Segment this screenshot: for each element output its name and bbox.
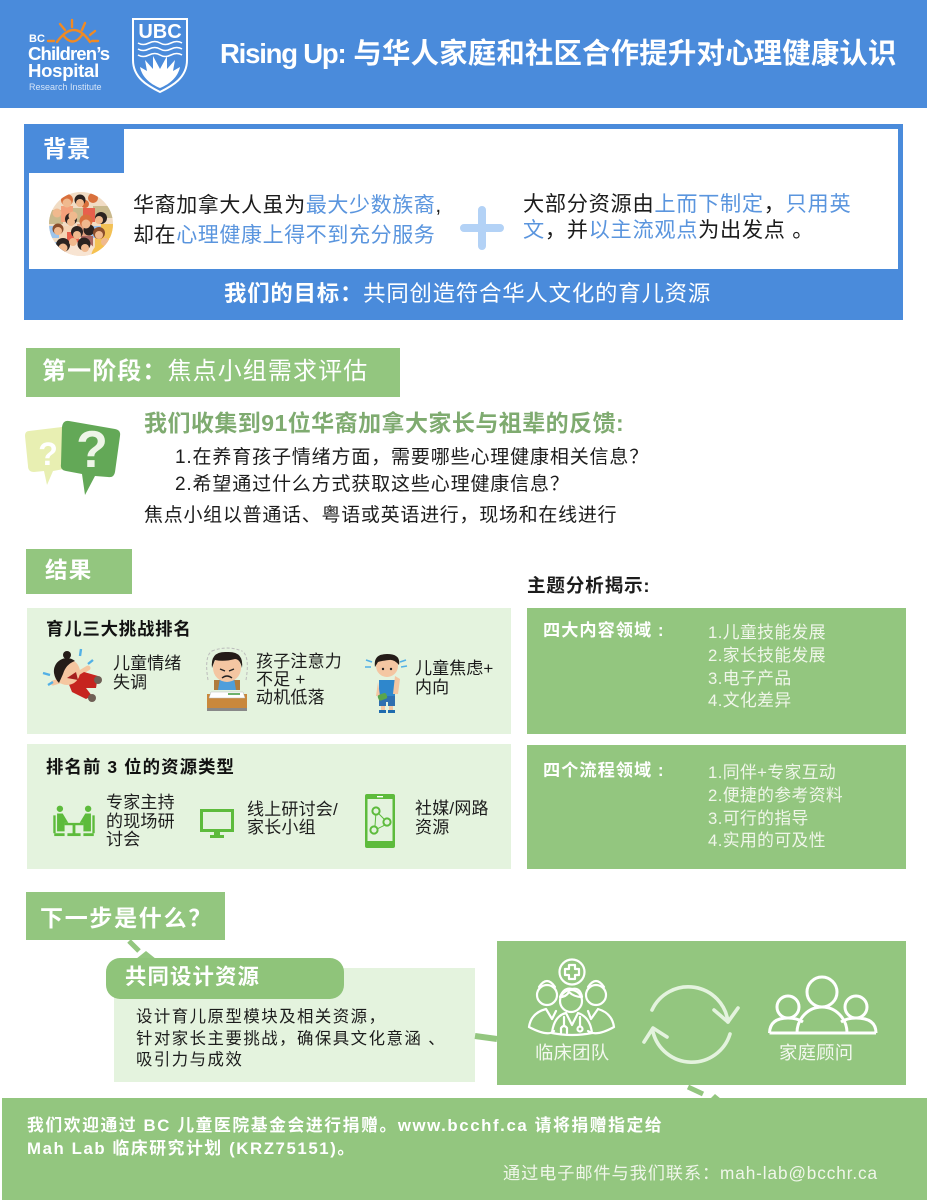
- question one: 1.在养育孩子情绪方面，需要哪些心理健康相关信息？: [175, 447, 649, 468]
- label: emotional dysregulation: 儿童情绪: [113, 654, 181, 673]
- label: inattention and low motivation: 动机低落: [256, 688, 325, 707]
- goal statement: 我们的目标：共同创造符合华人文化的育儿资源: [224, 281, 711, 306]
- heading pill: co-design resources: [106, 958, 344, 999]
- logo text: Research Institute: [29, 82, 102, 92]
- heading: phase one: [26, 348, 400, 397]
- icon: clinical team: [528, 958, 616, 1036]
- text: phase one details: [144, 410, 649, 526]
- label: anxiety and introversion: 儿童焦虑+: [415, 659, 493, 678]
- label: family advisors: 家庭顾问: [779, 1042, 853, 1063]
- logo text: Children’s: [28, 43, 109, 64]
- body text: 设计育儿原型模块及相关资源，: [136, 1008, 386, 1026]
- icon: orange sun: [46, 18, 100, 44]
- label: in-person workshop: 讨会: [106, 830, 140, 849]
- heading text: 下一步是什么？: [40, 905, 213, 931]
- heading: thematic analysis: 主题分析揭示:: [527, 575, 650, 596]
- icon: family advisors: [768, 976, 878, 1034]
- logo text: [28, 33, 110, 92]
- icon: smartphone network: [365, 794, 395, 848]
- icon: reciprocal arrows: [642, 985, 740, 1064]
- label: social media: 资源: [415, 818, 449, 836]
- text: right statement: 大部分资源由上而下制定，只用英: [523, 193, 851, 216]
- panel: four content areas: [527, 608, 906, 734]
- list: 4.实用的可及性: [708, 831, 826, 850]
- label: webinars: [247, 800, 338, 837]
- body text: 针对家长主要挑战，确保具文化意涵 、: [136, 1030, 446, 1048]
- icon: question mark bubbles: ?: [38, 436, 58, 472]
- connector: heading to co-design: [127, 940, 155, 958]
- logo: UBC shield: UBC: [138, 21, 182, 43]
- heading: results: [26, 549, 132, 594]
- list: 1.儿童技能发展: [708, 623, 826, 642]
- icon: question mark bubbles: ?: [76, 421, 108, 479]
- list: 2.家长技能发展: [708, 646, 826, 665]
- label: webinars: 线上研讨会/: [247, 800, 338, 819]
- list: 3.电子产品: [708, 669, 792, 688]
- text: left statement: [133, 194, 442, 247]
- white content area: [29, 129, 898, 269]
- list: [708, 763, 843, 850]
- label: in-person workshop: 的现场研: [106, 812, 175, 830]
- icon: crowd of people: [49, 192, 113, 256]
- method note: 焦点小组以普通话、粤语或英语进行，现场和在线进行: [144, 505, 617, 526]
- label: in-person workshop: [106, 793, 175, 849]
- label: emotional dysregulation: 失调: [113, 673, 147, 692]
- label: anxiety and introversion: 内向: [415, 678, 449, 697]
- label: social media: 社媒/网路: [415, 799, 489, 818]
- footer: [2, 1098, 927, 1200]
- contact text: 通过电子邮件与我们联系：mah-lab@bcchr.ca: [503, 1163, 878, 1183]
- icon: anxious child: [365, 654, 408, 713]
- body text: 吸引力与成效: [136, 1051, 243, 1069]
- panel heading: 四大内容领域 :: [543, 620, 665, 640]
- panel: top three parenting challenges: [27, 608, 511, 734]
- icon: plus: [460, 206, 504, 250]
- panel heading: 四个流程领域 :: [543, 760, 665, 780]
- heading text: 背景: [43, 136, 91, 162]
- connector: co-design to team panel: [474, 1033, 497, 1042]
- icon: tantrum child: [42, 648, 102, 702]
- heading text: 共同设计资源: [125, 965, 260, 989]
- text: right statement: [523, 193, 851, 242]
- icon: monitor: [200, 809, 234, 838]
- panel: background: [24, 124, 903, 320]
- panel: clinical team and family advisors: [497, 941, 906, 1085]
- list: 2.便捷的参考资料: [708, 786, 843, 805]
- list: 3.可行的指导: [708, 809, 809, 828]
- list: [708, 623, 826, 710]
- label: social media: [415, 799, 489, 836]
- panel heading: 排名前 3 位的资源类型: [46, 757, 235, 777]
- logo: UBC shield: [132, 18, 188, 94]
- heading text: 结果: [45, 558, 92, 583]
- label: webinars: 家长小组: [247, 818, 316, 837]
- connector: team panel to footer: [687, 1085, 720, 1098]
- panel heading: 育儿三大挑战排名: [46, 619, 192, 639]
- label: clinical team: 临床团队: [535, 1042, 609, 1063]
- body text: [136, 1008, 446, 1069]
- donation text: Mah Lab 临床研究计划 (KRZ75151)。: [27, 1139, 356, 1158]
- logo text: Hospital: [28, 60, 99, 81]
- text: right statement: 文，并以主流观点为出发点 。: [523, 219, 814, 242]
- question two: 2.希望通过什么方式获取这些心理健康信息？: [175, 474, 570, 495]
- text: left statement: 华裔加拿大人虽为最大少数族裔,: [133, 194, 442, 217]
- sub-heading: 我们收集到91位华裔加拿大家长与祖辈的反馈:: [144, 410, 624, 436]
- icon: question mark bubbles: [25, 420, 120, 495]
- icon: inattentive child at desk: [206, 648, 248, 711]
- panel: four process areas: [527, 745, 906, 869]
- heading text: 第一阶段：焦点小组需求评估: [42, 358, 368, 385]
- title: Rising Up: 与华人家庭和社区合作提升对心理健康认识: [220, 38, 897, 70]
- text: left statement: 却在心理健康上得不到充分服务: [133, 224, 435, 247]
- list: 4.文化差异: [708, 691, 792, 710]
- header banner: [0, 0, 927, 108]
- heading: what's next: [26, 892, 225, 940]
- label: inattention and low motivation: 孩子注意力: [256, 652, 342, 671]
- logo text: BC: [29, 33, 45, 45]
- list: 1.同伴+专家互动: [708, 763, 836, 782]
- label: anxiety and introversion: [415, 659, 493, 697]
- logo: BC Children's Hospital: [28, 18, 110, 92]
- label: inattention and low motivation: 不足 +: [256, 670, 305, 689]
- label: in-person workshop: 专家主持: [106, 793, 175, 812]
- panel: co-design body: [114, 968, 475, 1082]
- icon: in-person workshop: [53, 806, 95, 836]
- heading tab: background: [24, 124, 124, 173]
- label: emotional dysregulation: [113, 654, 181, 692]
- panel: top three resource types: [27, 744, 511, 869]
- label: inattention and low motivation: [256, 652, 342, 707]
- donation text: 我们欢迎通过 BC 儿童医院基金会进行捐赠。www.bcchf.ca 请将捐赠指定给: [27, 1116, 663, 1135]
- donation text: [27, 1116, 663, 1158]
